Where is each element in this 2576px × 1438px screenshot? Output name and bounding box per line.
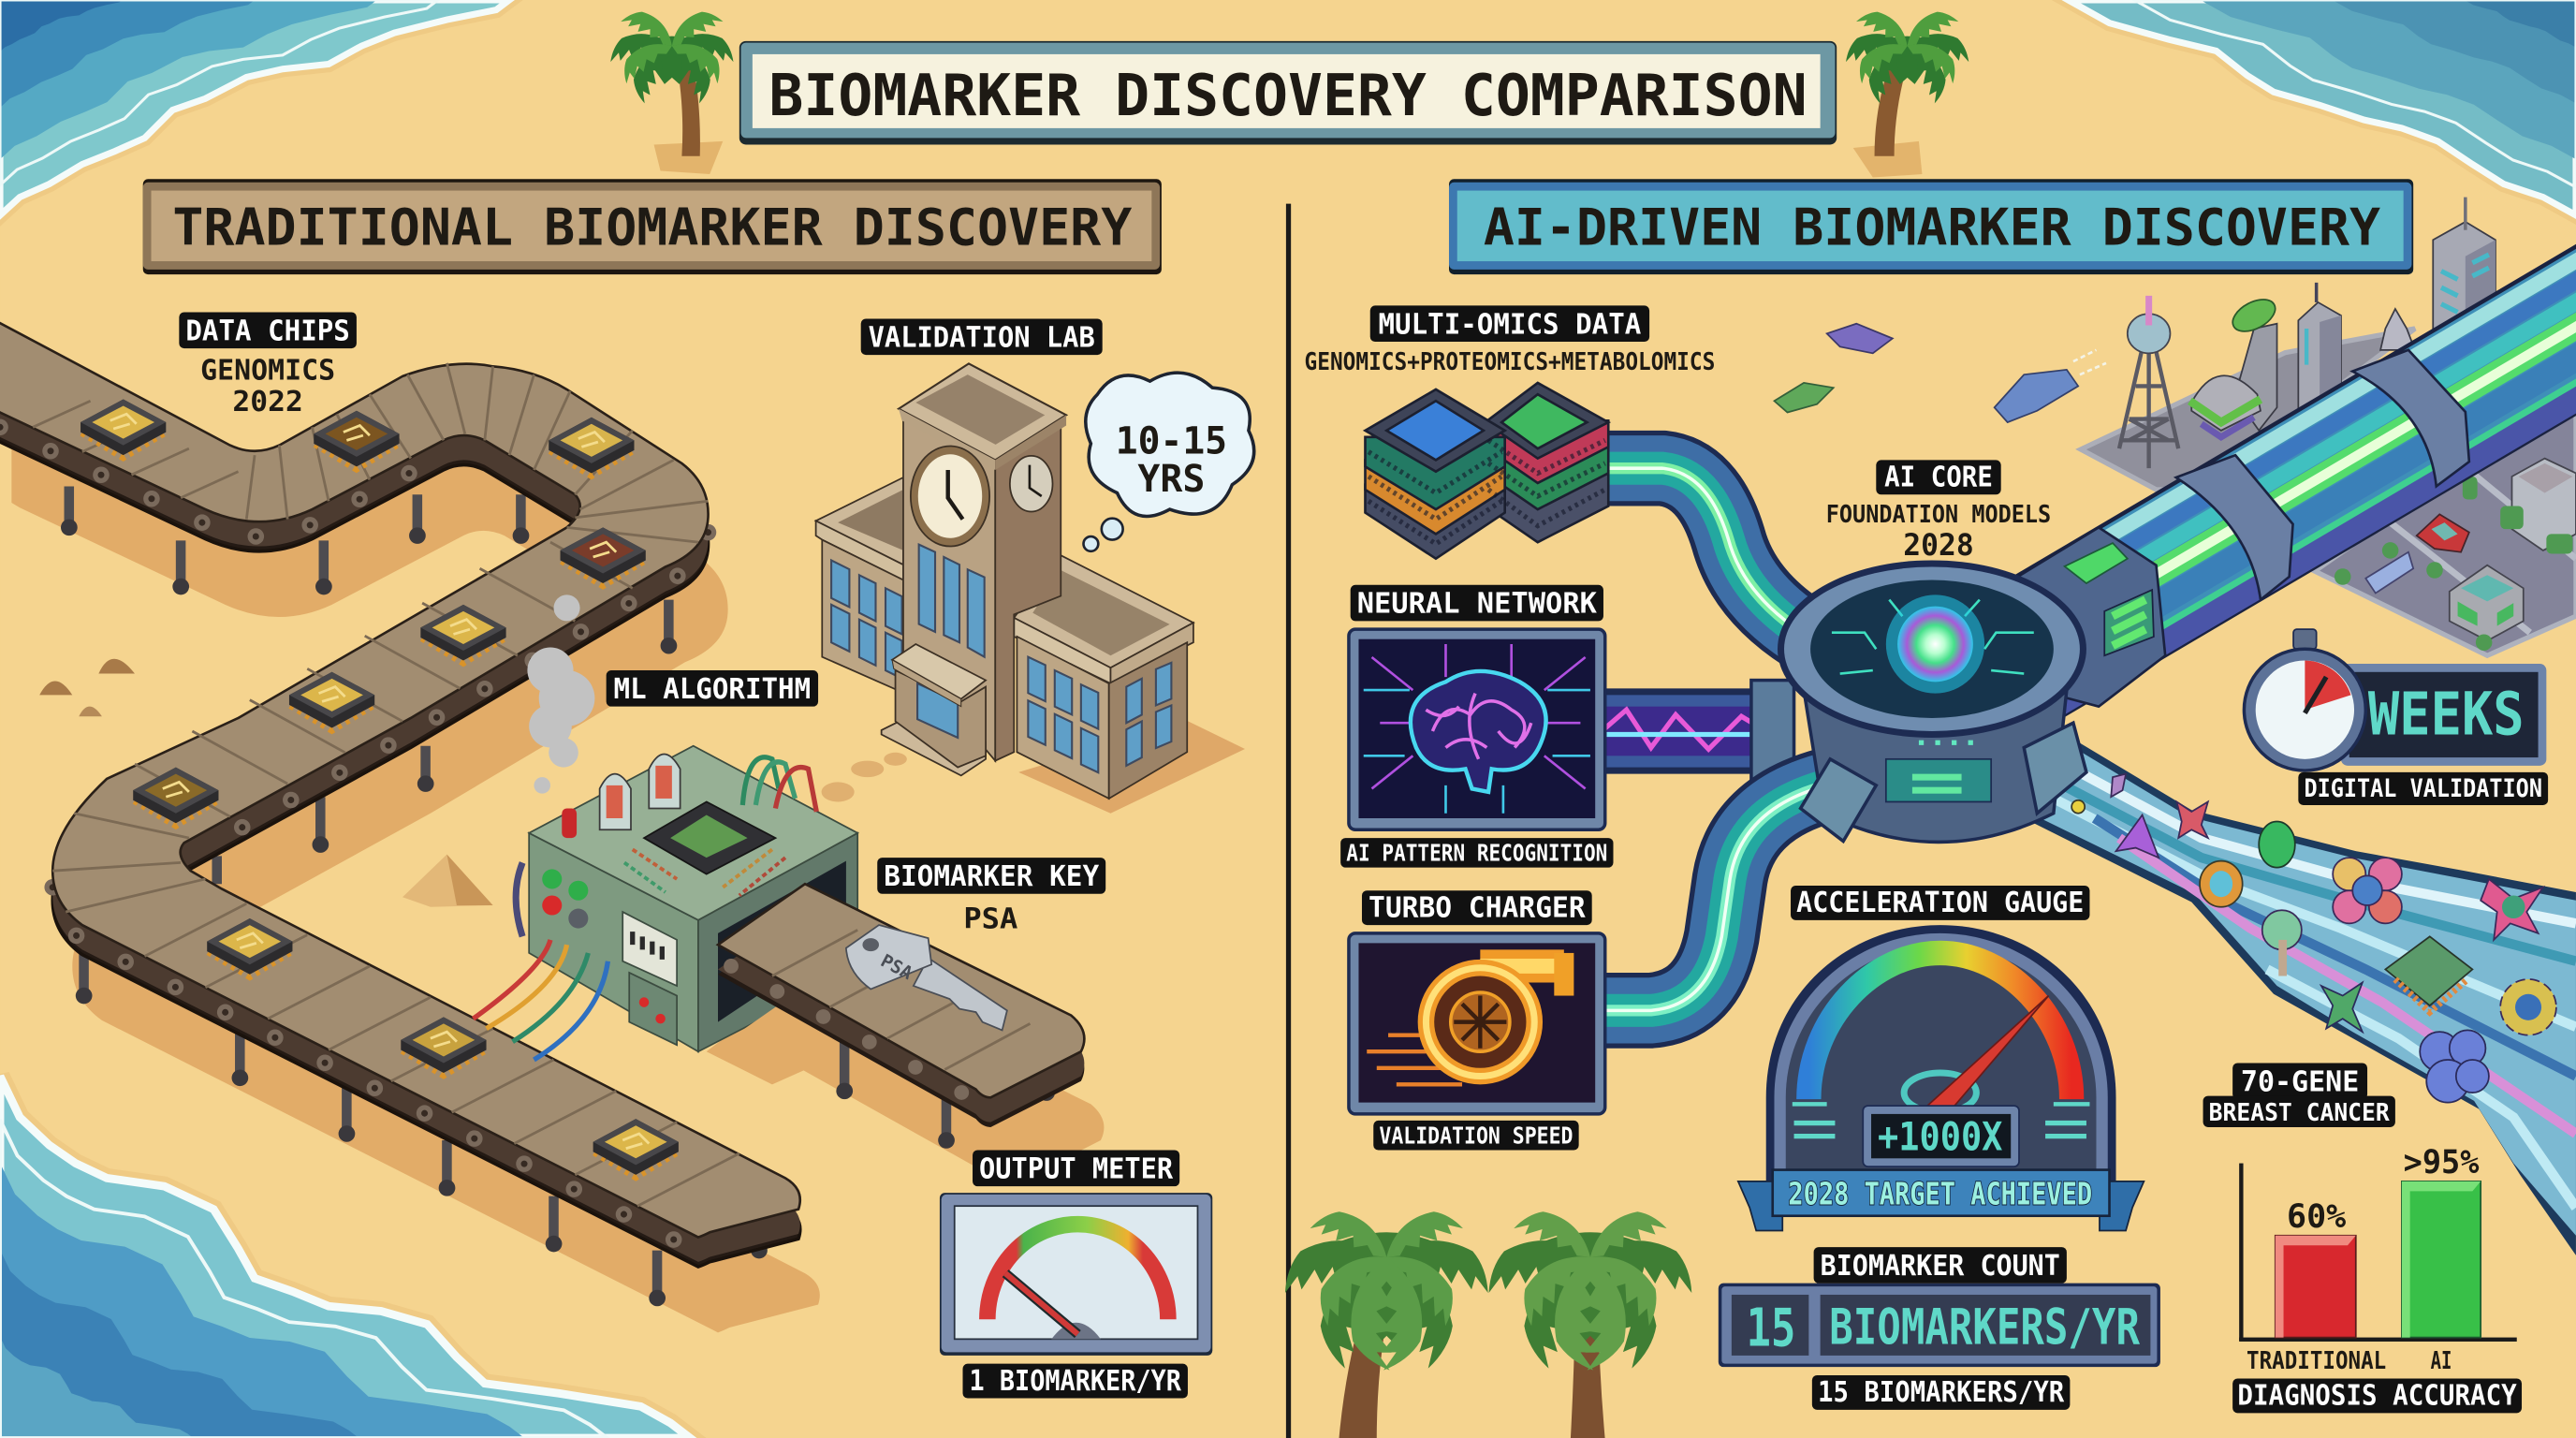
thought bubble: 10-15 yrs: YRS: [1137, 457, 1205, 501]
multi-omics chip stacks: [1365, 383, 1608, 559]
label: multi-omics data: MULTI-OMICS DATA: [1379, 308, 1641, 341]
biomarker key: psa: PSA: [877, 949, 916, 984]
future city: lower platform: [2315, 411, 2576, 655]
machine cpu chip: [644, 801, 775, 874]
heading: ai-driven: AI-DRIVEN BIOMARKER DISCOVERY: [1484, 198, 2380, 257]
future city: upper platform: [2081, 198, 2496, 490]
belt legs: [69, 486, 759, 1298]
label: biomarker count: BIOMARKER COUNT: [1821, 1250, 2060, 1283]
bar chart: diagnosis accuracy: TRADITIONAL: [2247, 1346, 2386, 1374]
panel: neural network: [1349, 629, 1605, 829]
output meter: [940, 1193, 1212, 1356]
acceleration gauge: [1738, 925, 2144, 1231]
lab right wing: [1014, 555, 1193, 799]
title banner: [739, 41, 1837, 144]
bar chart: diagnosis accuracy: [2239, 1143, 2517, 1374]
trees: [2334, 477, 2572, 651]
red car: [2417, 514, 2469, 552]
stopwatch and weeks display: WEEKS: [2368, 679, 2525, 748]
text: foundation models 2028: FOUNDATION MODELS: [1826, 500, 2051, 528]
biomarker key: psa: [846, 925, 1007, 1030]
label: digital validation: DIGITAL VALIDATION: [2304, 775, 2542, 803]
machine wires arcs: [742, 757, 816, 812]
text: foundation models 2028: 2028: [1903, 529, 1974, 563]
label: 70-gene breast cancer: [2203, 1064, 2395, 1127]
belt surface slats: [33, 363, 739, 1206]
text: omics list: GENOMICS+PROTEOMICS+METABOLOMICS: [1305, 347, 1715, 375]
biomarker count display: [1719, 1284, 2160, 1367]
gauge readout: [1863, 1106, 2019, 1167]
label: data chips: DATA CHIPS: [185, 315, 350, 347]
green house: [2450, 565, 2524, 640]
belt side rollers: [0, 427, 708, 1252]
bar: traditional 60%: 60%: [2287, 1197, 2346, 1236]
stack left: [1365, 389, 1505, 559]
label: ml algorithm: ML ALGORITHM: [614, 673, 811, 706]
smoke from machine: [527, 594, 594, 794]
palm tree: top left: [610, 3, 734, 174]
pipe: neural network to core: [1602, 681, 1794, 782]
target banner: [1738, 1170, 2144, 1231]
sand details: rocks and piles: [39, 659, 907, 907]
ocean: top left: [0, 0, 509, 215]
belt surface: [0, 318, 800, 1238]
pipeline bands: [2012, 350, 2469, 707]
panel: turbo charger: [1349, 933, 1605, 1114]
lab shadow: [1018, 721, 1245, 814]
stack pin texture: [1368, 440, 1605, 544]
tall skyscraper: [2433, 198, 2496, 370]
label: neural network: NEURAL NETWORK: [1357, 588, 1597, 621]
connector rings: [1801, 723, 2086, 842]
bus: [2365, 552, 2413, 594]
ocean: bottom left: [0, 1077, 690, 1438]
label: 1 biomarker per year: 1 BIOMARKER/YR: [970, 1365, 1181, 1398]
label: ai pattern recognition: AI PATTERN RECOGNITION: [1346, 840, 1607, 867]
machine buttons: [516, 862, 677, 1045]
lab clock tower: [899, 363, 1066, 761]
machine tubes: [562, 755, 681, 838]
label: output meter: OUTPUT METER: [979, 1152, 1173, 1185]
stopwatch and weeks display: [2244, 629, 2546, 770]
pipe: turbo charger to core: [1602, 785, 1827, 1010]
text: genomics 2022: [200, 354, 335, 418]
belt feet: [69, 527, 759, 1298]
target banner: 2028 TARGET ACHIEVED: [1788, 1175, 2092, 1211]
title banner: BIOMARKER DISCOVERY COMPARISON: [768, 63, 1808, 129]
label: diagnosis accuracy: DIAGNOSIS ACCURACY: [2237, 1380, 2517, 1413]
mid towers: [2228, 283, 2415, 431]
center divider: [1286, 204, 1291, 1438]
office: [2511, 459, 2576, 550]
bar: ai 95%: [2402, 1143, 2481, 1338]
label: acceleration gauge: ACCELERATION GAUGE: [1796, 887, 2084, 919]
label: turbo charger: TURBO CHARGER: [1368, 891, 1586, 924]
thought bubble: 10-15 yrs: 10-15: [1116, 418, 1227, 462]
ml algorithm machine: [474, 746, 920, 1084]
bar chart: diagnosis accuracy: AI: [2431, 1346, 2452, 1374]
lab entrance: [882, 644, 986, 775]
validation lab building: [816, 363, 1245, 814]
ocean: top right: [2069, 0, 2576, 215]
ai core hub: [1778, 560, 2086, 842]
pipe: multi-omics to core: [1602, 468, 1815, 640]
text: genomics 2022: 2022: [232, 386, 303, 418]
text: psa: PSA: [963, 903, 1017, 936]
biomarker count display: 15: [1747, 1298, 1795, 1358]
belt ground shadow: [11, 414, 820, 1332]
data chips on belt: [80, 399, 679, 1177]
molecules: [2071, 774, 2556, 1103]
bar: traditional 60%: [2276, 1197, 2356, 1338]
palm tree: bottom right: [1488, 1197, 1692, 1438]
colored wires: [474, 940, 607, 1060]
data river with molecules: [2027, 741, 2576, 1255]
stack right: [1486, 383, 1608, 542]
flying vehicles: [1774, 324, 2106, 422]
biomarker count display: BIOMARKERS/YR: [1829, 1299, 2140, 1357]
palm tree: top right: [1846, 3, 1969, 178]
text: genomics 2022: GENOMICS: [200, 354, 335, 387]
main data pipeline: [2012, 230, 2576, 726]
conveyor belt: main: [0, 318, 820, 1332]
lab left wing: [816, 477, 903, 693]
text: foundation models 2028: [1826, 500, 2051, 563]
dome building: [2190, 375, 2261, 437]
radio tower: [2119, 296, 2178, 468]
bar: ai 95%: >95%: [2404, 1143, 2479, 1181]
label: 70-gene breast cancer: 70-GENE: [2241, 1065, 2359, 1098]
palm tree: bottom left: [1284, 1197, 1488, 1438]
thought bubble: 10-15 yrs: [1083, 373, 1254, 551]
belt side: [0, 348, 800, 1267]
label: 15 biomarkers per year: 15 BIOMARKERS/YR: [1818, 1376, 2064, 1409]
gauge readout: +1000X: [1878, 1114, 2002, 1160]
label: validation speed: VALIDATION SPEED: [1379, 1122, 1573, 1149]
label: ai core: AI CORE: [1884, 461, 1993, 493]
label: 70-gene breast cancer: BREAST CANCER: [2209, 1098, 2390, 1126]
conveyor belt: output: [718, 884, 1104, 1186]
label: biomarker key: BIOMARKER KEY: [884, 860, 1099, 893]
label: validation lab: VALIDATION LAB: [869, 321, 1095, 354]
heading: ai-driven: [1449, 179, 2413, 274]
heading: traditional: TRADITIONAL BIOMARKER DISCOVERY: [172, 198, 1133, 257]
heading: traditional: [143, 179, 1162, 274]
